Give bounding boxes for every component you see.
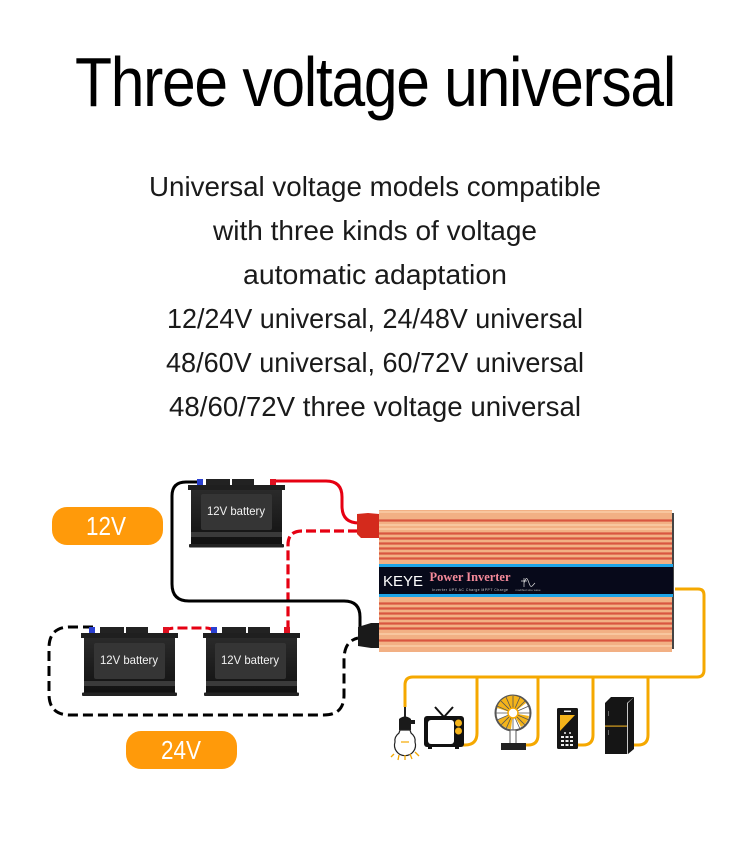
- battery: 12V top: 12V battery: [207, 504, 265, 518]
- badge: 24V: [126, 731, 237, 769]
- connector: red positive terminal: [357, 513, 379, 538]
- badge: 12V: 12V: [86, 511, 127, 541]
- inverter top heat-sink fins: [379, 510, 672, 565]
- description text block: Universal voltage models compatible: [149, 171, 601, 202]
- battery: lower right: [203, 627, 300, 696]
- inverter: [379, 510, 674, 652]
- battery: lower left: [81, 627, 178, 696]
- battery: lower left: 12V battery: [100, 653, 158, 667]
- inverter label panel: KEYE: [383, 573, 423, 590]
- title: Three voltage universal: [75, 43, 675, 121]
- inverter label panel: Inverter UPS AC Charge MPPT Charge: [432, 588, 508, 592]
- description text block: 12/24V universal, 24/48V universal: [167, 303, 583, 334]
- icon: electric fan: [496, 696, 530, 750]
- inverter label panel: Power Inverter: [430, 570, 511, 584]
- inverter bottom heat-sink fins: [379, 596, 672, 652]
- badge: 12V: [52, 507, 163, 545]
- description text block: [149, 171, 601, 422]
- description text block: automatic adaptation: [243, 259, 507, 290]
- description text block: with three kinds of voltage: [212, 215, 537, 246]
- wire: AC output to appliances: [405, 589, 704, 745]
- wire: 24V positive dashed: [288, 531, 358, 632]
- battery: lower right: 12V battery: [221, 653, 279, 667]
- wire: 24V negative dashed loop: [49, 627, 358, 715]
- wire: 12V negative black: [172, 482, 360, 628]
- icon: refrigerator: [605, 697, 634, 754]
- icon: light bulb: [391, 707, 419, 760]
- icon: mobile phone: [557, 708, 578, 749]
- connector: black negative terminal: [358, 623, 379, 648]
- wire: series link between batteries: [164, 628, 213, 631]
- wire: 12V positive red: [274, 481, 359, 523]
- inverter label panel: modified sine wave: [516, 588, 541, 592]
- icon: television: [424, 707, 464, 749]
- inverter label panel: [379, 564, 673, 597]
- description text block: 48/60/72V three voltage universal: [169, 391, 581, 422]
- battery: 12V top: [188, 479, 285, 548]
- description text block: 48/60V universal, 60/72V universal: [166, 347, 584, 378]
- badge: 24V: 24V: [161, 735, 202, 765]
